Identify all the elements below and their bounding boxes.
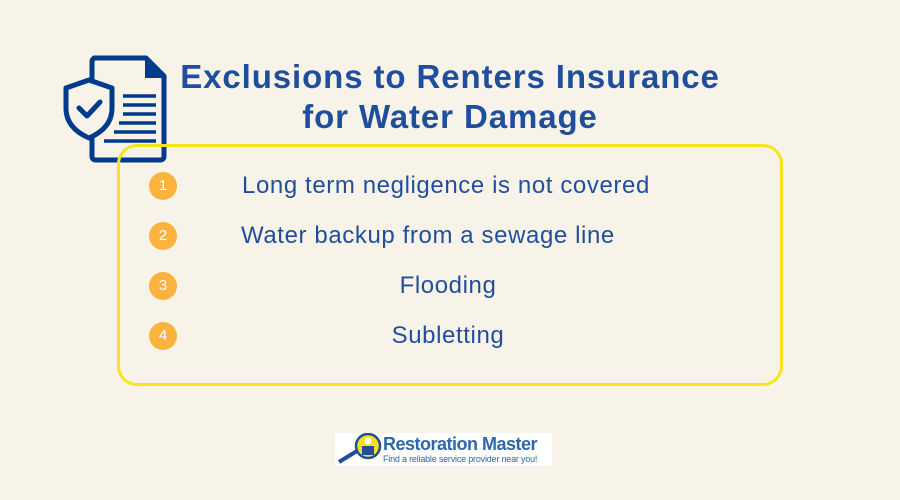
icon: document with shield [64, 56, 166, 162]
logo: Find a reliable service provider near you! [383, 454, 537, 464]
text: 1 [159, 177, 167, 194]
title: Exclusions to Renters Insurance [180, 58, 720, 95]
panel: exclusions list [117, 144, 783, 386]
text: 4 [159, 327, 167, 344]
text: Flooding [400, 272, 496, 299]
item 3 [149, 272, 496, 300]
item 4 [149, 322, 504, 350]
item 1 [149, 172, 650, 200]
logo: Restoration Master [383, 434, 537, 454]
title [180, 58, 720, 135]
text: Subletting [392, 322, 504, 349]
title: for Water Damage [302, 98, 598, 135]
item 2 [149, 222, 615, 250]
logo [335, 433, 552, 466]
text: 2 [159, 227, 167, 244]
text: Water backup from a sewage line [241, 222, 615, 249]
text: 3 [159, 277, 167, 294]
text: Long term negligence is not covered [242, 172, 650, 199]
